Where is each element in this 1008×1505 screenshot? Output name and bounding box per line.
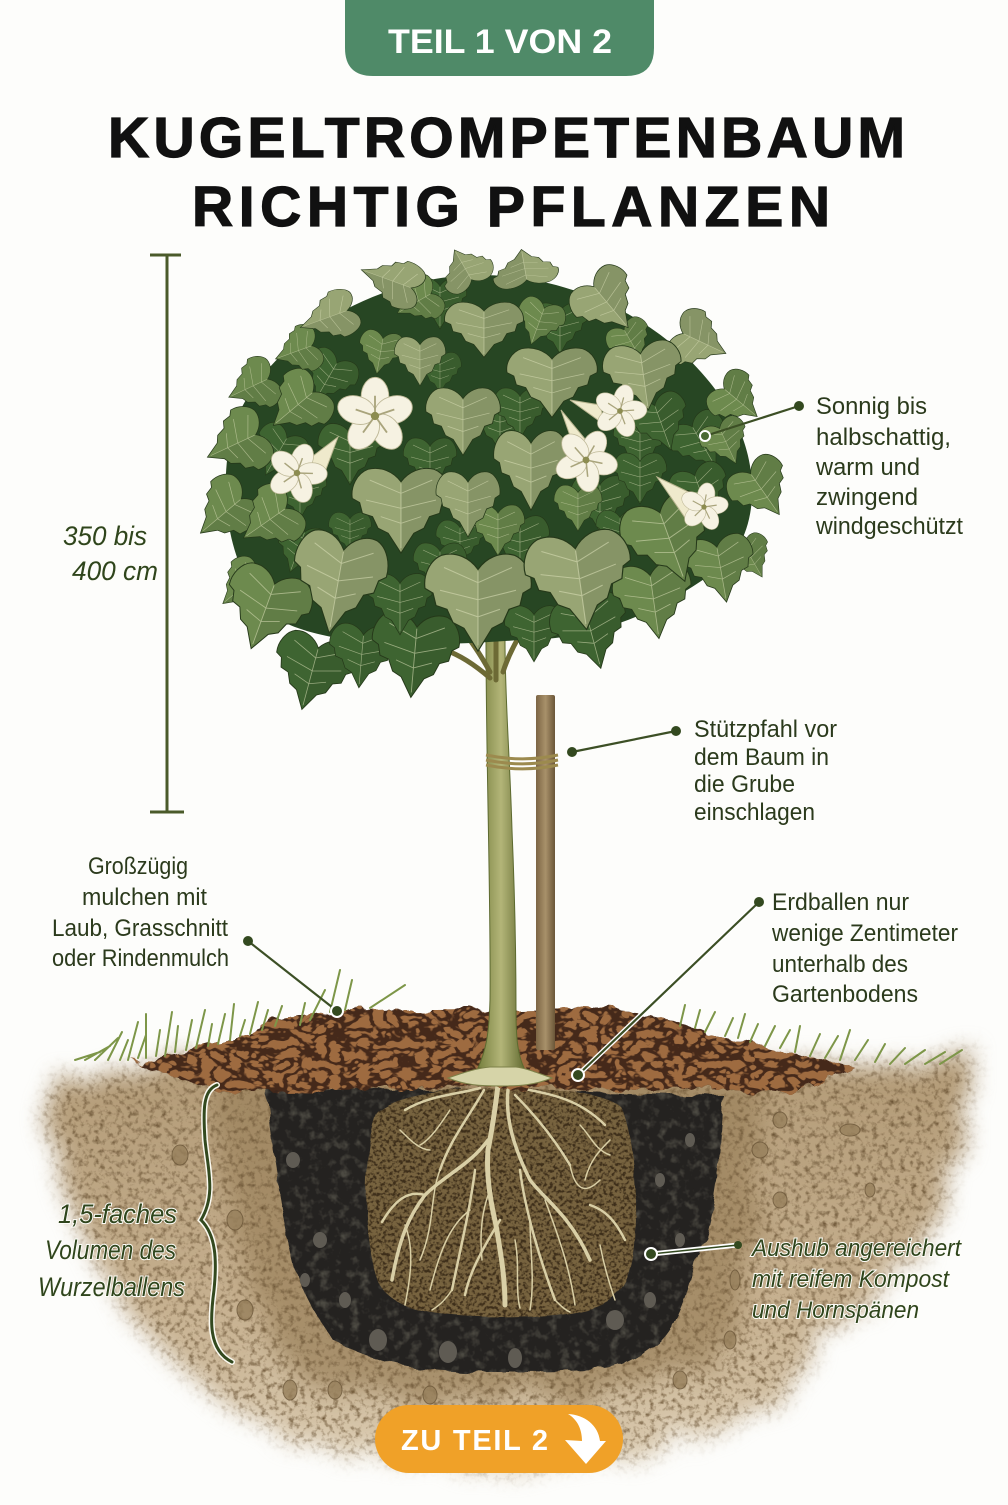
grass left	[75, 970, 405, 1060]
trunk collar	[448, 1067, 552, 1086]
root ball	[366, 1085, 636, 1317]
volume label	[38, 1199, 185, 1302]
callout: stake: einschlagen	[694, 799, 815, 826]
callout: root ball depth: wenige Zentimeter	[771, 920, 958, 947]
mulch layer	[135, 1007, 855, 1092]
grass right	[680, 1005, 962, 1064]
volume label: 1,5-faches	[58, 1199, 177, 1229]
icon: curved down arrow	[565, 1414, 606, 1464]
callout: backfill	[645, 1235, 962, 1324]
callout: stake	[567, 716, 837, 826]
mid leaf layer	[179, 269, 805, 663]
roots	[382, 1085, 625, 1312]
callout: stake: dem Baum in	[694, 744, 829, 771]
height scale bracket	[150, 254, 184, 812]
curly brace	[201, 1085, 232, 1362]
title	[108, 106, 905, 239]
callout: mulch: mulchen mit	[82, 884, 207, 911]
callout: location	[700, 393, 963, 540]
callout: location: warm und	[815, 454, 920, 481]
callout: location: windgeschützt	[815, 513, 963, 540]
soil cross-section	[45, 1058, 985, 1465]
callout: backfill: und Hornspänen	[752, 1297, 919, 1324]
volume label: Wurzelballens	[38, 1272, 185, 1302]
support stake	[536, 695, 555, 1050]
title: RICHTIG PFLANZEN	[192, 175, 830, 239]
height label	[63, 521, 158, 586]
trunk	[478, 640, 524, 1068]
flowers	[256, 377, 734, 536]
dark leaf layer	[242, 278, 741, 720]
callout: root ball depth: unterhalb des	[772, 951, 908, 978]
tree crown	[179, 237, 805, 720]
title: KUGELTROMPETENBAUM	[108, 106, 905, 170]
pebbles	[146, 1112, 875, 1404]
callout: mulch: Laub, Grasschnitt	[52, 915, 228, 942]
callout: mulch: Großzügig	[88, 853, 188, 880]
badge: part 1 of 2	[345, 0, 654, 76]
callout: root ball depth	[572, 889, 958, 1081]
callout: location: halbschattig,	[816, 424, 951, 451]
badge: part 1 of 2: TEIL 1 VON 2	[388, 23, 612, 61]
branches	[445, 590, 540, 680]
volume label: Volumen des	[45, 1235, 176, 1265]
callout: location: Sonnig bis	[816, 393, 927, 420]
button: to part 2: ZU TEIL 2	[401, 1425, 548, 1457]
callout: stake: die Grube	[694, 771, 795, 798]
callout: mulch: oder Rindenmulch	[52, 945, 229, 972]
light leaf layer	[283, 237, 738, 651]
planting pit with enriched backfill	[266, 1088, 723, 1372]
callout: stake: Stützpfahl vor	[694, 716, 837, 743]
height label: 400 cm	[72, 556, 158, 586]
callout: location: zwingend	[816, 484, 918, 511]
tree tie	[486, 755, 558, 769]
height label: 350 bis	[63, 521, 147, 551]
callout: mulch	[52, 853, 343, 1017]
callout: backfill: mit reifem Kompost	[752, 1266, 950, 1293]
callout: root ball depth: Erdballen nur	[772, 889, 909, 916]
button: to part 2	[375, 1405, 623, 1473]
callout: root ball depth: Gartenbodens	[772, 981, 918, 1008]
callout: backfill: Aushub angereichert	[750, 1235, 962, 1262]
